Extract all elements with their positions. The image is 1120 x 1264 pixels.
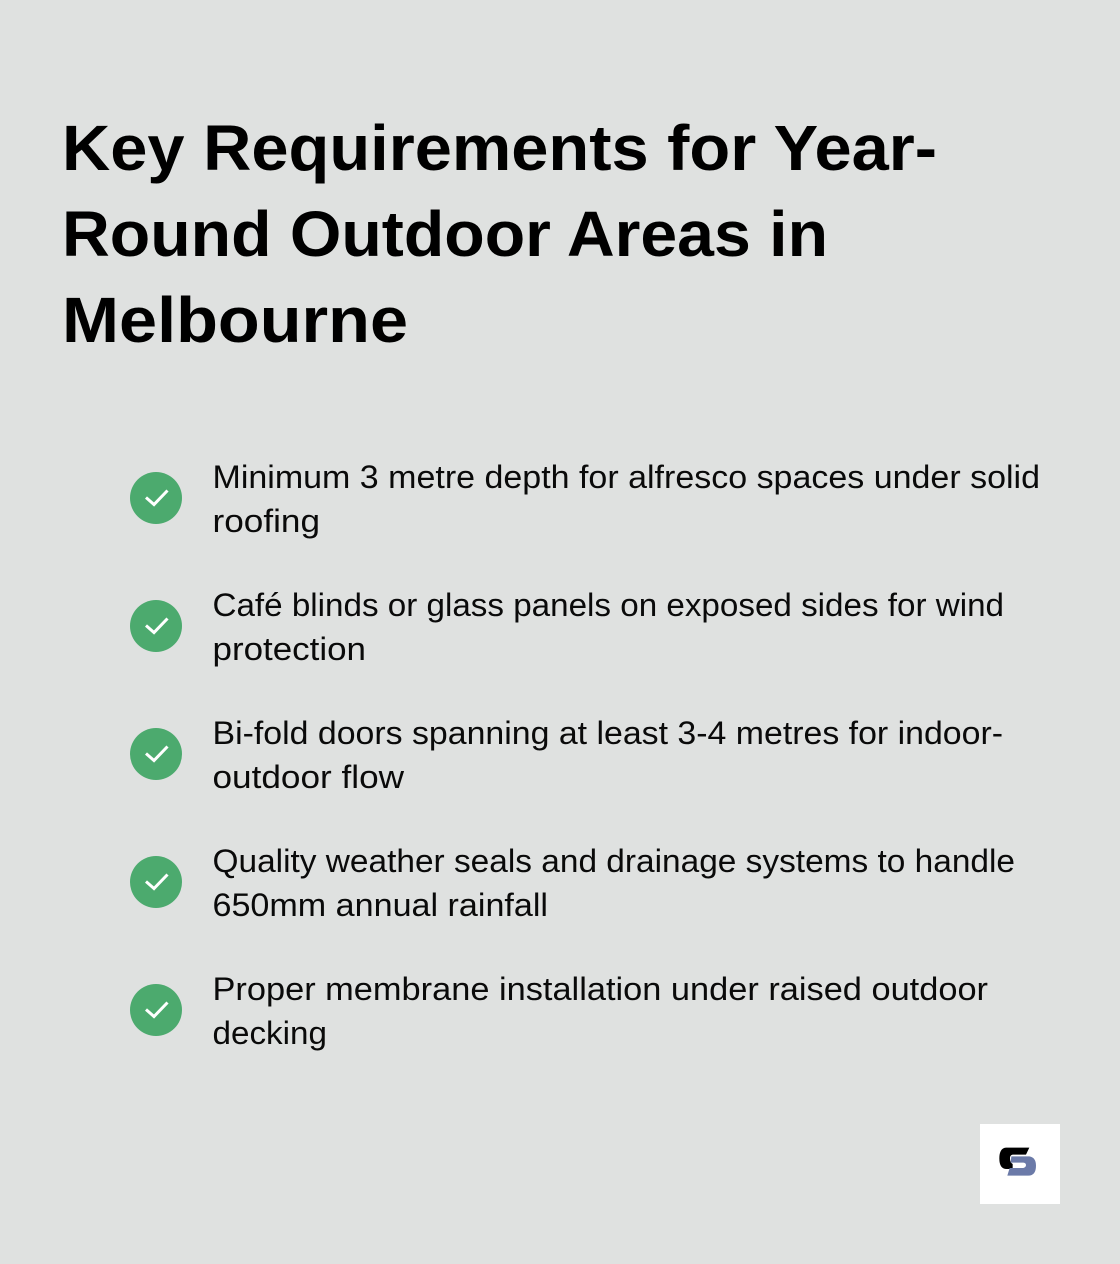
icon: check circle 1 bbox=[130, 472, 182, 524]
text: membrane installation: Proper membrane installation under raised outdoor bbox=[212, 971, 988, 1007]
text: weather seals: Quality weather seals and drainage systems to handle bbox=[212, 843, 1015, 879]
checklist item 2 bbox=[130, 587, 1004, 667]
title bbox=[62, 112, 937, 356]
text: weather seals: 650mm annual rainfall bbox=[212, 887, 548, 923]
text: wind protection: protection bbox=[212, 631, 366, 667]
icon: check circle 5 bbox=[130, 984, 182, 1036]
logo badge bbox=[980, 1124, 1060, 1204]
icon: check circle 4 bbox=[130, 856, 182, 908]
text: wind protection bbox=[212, 587, 1004, 667]
text: depth requirement bbox=[212, 459, 1040, 539]
text: bi-fold doors bbox=[212, 715, 1003, 795]
text: bi-fold doors: Bi-fold doors spanning at least 3-4 metres for indoor- bbox=[212, 715, 1003, 751]
checklist item 4 bbox=[130, 843, 1015, 923]
title: Key Requirements for Year- bbox=[62, 112, 937, 184]
text: depth requirement: Minimum 3 metre depth for alfresco spaces under solid bbox=[212, 459, 1040, 495]
text: wind protection: Café blinds or glass panels on exposed sides for wind bbox=[212, 587, 1004, 623]
checklist item 1 bbox=[130, 459, 1040, 539]
text: depth requirement: roofing bbox=[212, 503, 320, 539]
text: bi-fold doors: outdoor flow bbox=[212, 759, 405, 795]
icon: check circle 3 bbox=[130, 728, 182, 780]
title: Melbourne bbox=[62, 284, 408, 356]
icon: check circle 2 bbox=[130, 600, 182, 652]
icon: S logo bbox=[999, 1148, 1036, 1176]
text: weather seals bbox=[212, 843, 1015, 923]
checklist item 5 bbox=[130, 971, 988, 1051]
title: Round Outdoor Areas in bbox=[62, 198, 828, 270]
text: membrane installation bbox=[212, 971, 988, 1051]
text: membrane installation: decking bbox=[212, 1015, 327, 1051]
checklist item 3 bbox=[130, 715, 1003, 795]
